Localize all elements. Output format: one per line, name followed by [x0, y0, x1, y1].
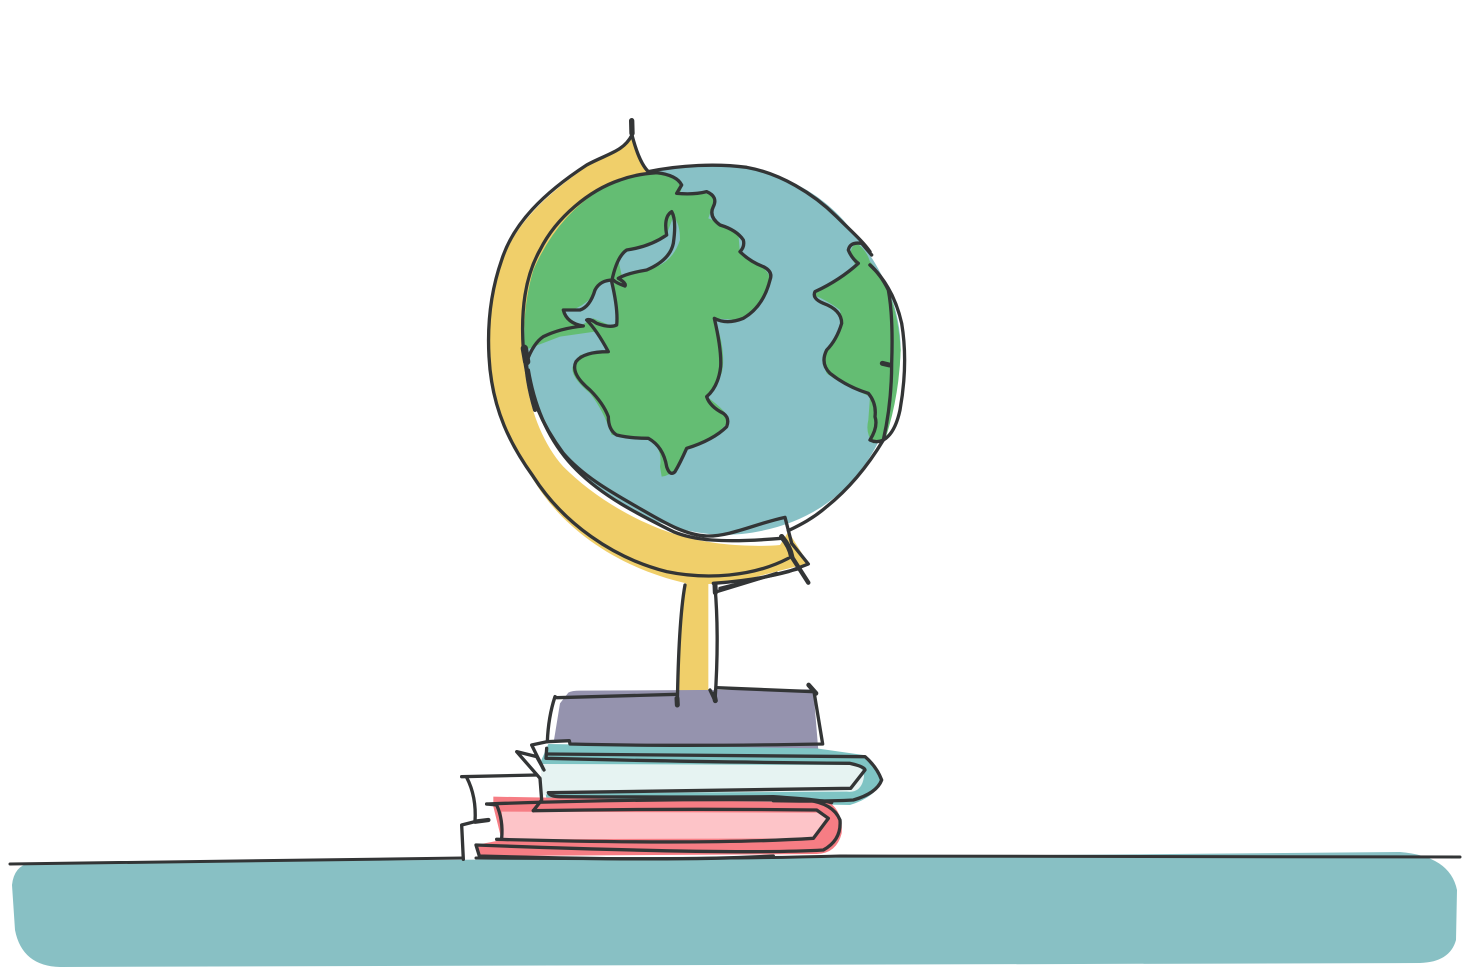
rim knot — [882, 363, 889, 365]
globe stem — [677, 583, 708, 692]
bottom book top line — [497, 809, 828, 842]
bottom book cover — [476, 797, 842, 856]
globe stand arc — [489, 138, 808, 584]
main continent coastline — [527, 173, 771, 473]
left page flap top — [462, 775, 537, 777]
stem line ends — [677, 585, 715, 705]
globe outline strokes — [489, 121, 905, 588]
globe — [489, 121, 905, 588]
bottom book back — [487, 804, 502, 838]
bottom book outer — [476, 800, 840, 859]
stem right line — [710, 587, 717, 701]
bottom book pages — [502, 812, 827, 839]
stand tip and globe top — [632, 135, 870, 252]
continent: left landmass — [524, 173, 769, 477]
stem left line — [677, 585, 685, 705]
stand top tip — [624, 121, 640, 133]
middle book spine — [547, 754, 882, 801]
clamp link — [717, 573, 777, 592]
globe lower arc — [523, 350, 808, 583]
middle book pages — [540, 764, 864, 797]
left page flap — [462, 777, 475, 859]
base outline — [547, 688, 823, 745]
globe ocean — [524, 165, 901, 535]
table band — [12, 852, 1457, 967]
right continent coastline — [814, 243, 892, 442]
flap knot — [475, 820, 488, 822]
middle book pages line — [546, 748, 865, 803]
middle book cover — [540, 744, 882, 805]
middle book fold — [517, 742, 547, 811]
globe right arc — [788, 440, 883, 531]
inlet: lower sea — [565, 282, 617, 327]
book and stem outlines — [462, 573, 882, 859]
left globe edge — [523, 173, 657, 350]
books and stand base — [462, 573, 882, 859]
base knot — [809, 685, 816, 693]
outer stand line — [489, 135, 788, 576]
base block — [554, 689, 818, 751]
stand lower clamp — [782, 537, 792, 557]
left pivot blob — [524, 348, 527, 362]
inlet: upper sea — [618, 217, 680, 275]
outer right rim — [870, 265, 905, 440]
continent: right landmass — [813, 243, 901, 443]
table line — [10, 856, 1460, 864]
left pivot line — [526, 360, 535, 410]
stand inner line — [528, 370, 782, 541]
